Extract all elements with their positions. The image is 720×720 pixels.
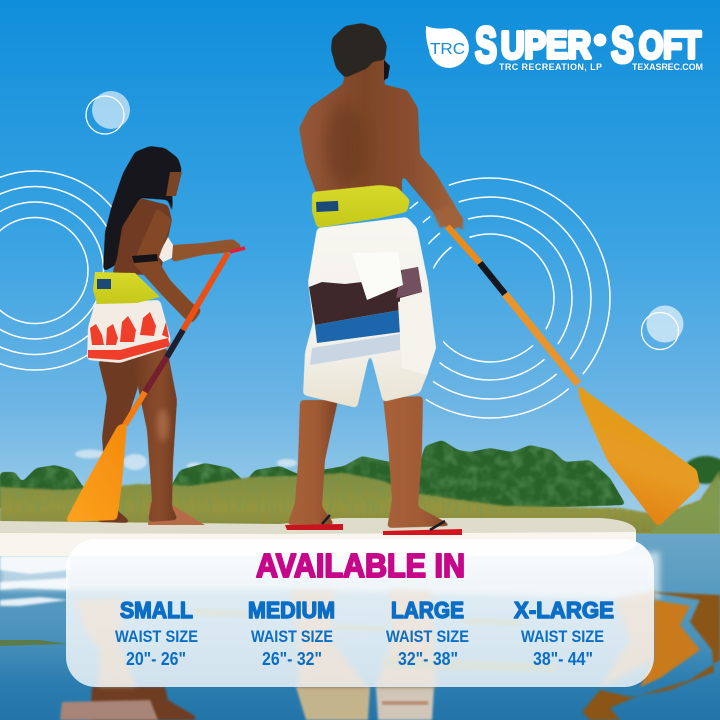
column: medium (248, 597, 335, 669)
man: board shorts (303, 217, 436, 408)
man: shorts brown band (309, 267, 422, 325)
logo: wordmark: S (611, 17, 634, 73)
woman: bikini (158, 237, 173, 262)
panel background (66, 539, 654, 687)
reflection: man (296, 687, 370, 720)
man: sunglasses (384, 60, 390, 80)
woman figure (65, 146, 245, 525)
column: large: WAIST SIZE (386, 627, 469, 646)
woman: skirt (87, 300, 171, 363)
column: large: 32"- 38" (398, 649, 458, 669)
man: hair (331, 23, 387, 78)
heading: available in: AVAILABLE IN (256, 547, 465, 584)
grass field (0, 470, 720, 534)
woman: far arm (168, 239, 243, 262)
column: x-large (514, 597, 614, 669)
reflections under the panel (75, 590, 654, 687)
water reflections (0, 552, 720, 720)
logo: website: TEXASREC.COM (632, 62, 703, 72)
sheen: board reflection (0, 552, 660, 600)
woman: near arm (133, 208, 202, 323)
sky background (0, 0, 720, 540)
bubble: right (642, 306, 684, 350)
column: small (115, 597, 198, 669)
column: medium: WAIST SIZE (251, 627, 333, 646)
logo: TRC droplet: TRC (430, 41, 465, 58)
man: flip-flops (285, 524, 343, 530)
treeline and grass (0, 440, 720, 534)
column: medium: MEDIUM (248, 597, 335, 623)
woman: torso (112, 198, 172, 275)
column: large: LARGE (391, 597, 464, 623)
clouds (75, 450, 297, 470)
water (0, 534, 720, 720)
man: paddle blade (577, 383, 700, 527)
column: large (386, 597, 469, 669)
column: small: WAIST SIZE (115, 627, 198, 646)
bubble: left (86, 91, 130, 134)
woman: hair (103, 146, 182, 272)
woman: belt logo (97, 279, 111, 289)
logo: wordmark (475, 17, 701, 73)
woman: skirt red pattern (88, 312, 170, 360)
logo (426, 17, 703, 73)
reflection: woman (90, 687, 195, 720)
woman: face (166, 172, 182, 196)
logo: wordmark: S (475, 17, 497, 73)
man: flotation belt (312, 185, 410, 228)
man: back pocket (352, 252, 403, 300)
logo: wordmark: UPER (501, 25, 591, 67)
logo: wordmark: OFT (639, 25, 701, 67)
woman: sandal foot (148, 502, 205, 525)
woman: paddle blade (65, 423, 127, 522)
man: head neck and shoulders (299, 55, 464, 232)
reflection: right paddle (582, 592, 720, 720)
column: small: 20"- 26" (126, 649, 186, 669)
woman: front leg (130, 348, 178, 522)
woman: flotation belt (93, 272, 160, 304)
man: shorts pale band (310, 334, 400, 365)
man: paddle shaft (447, 226, 578, 384)
woman: back leg (97, 358, 138, 523)
man: hand on paddle (433, 205, 463, 230)
man figure (285, 23, 700, 535)
woman: paddle shaft (125, 248, 245, 425)
rings: right concentric circles (408, 177, 611, 419)
logo: TRC droplet (426, 26, 469, 68)
man: belt logo (316, 201, 338, 212)
column: medium: 26"- 32" (262, 649, 322, 669)
man: legs (287, 400, 338, 525)
column: x-large: 38"- 44" (533, 649, 593, 669)
man: cargo pocket (398, 295, 436, 375)
column: x-large: WAIST SIZE (521, 627, 604, 646)
paddleboard (0, 518, 636, 556)
column: x-large: X-LARGE (514, 597, 614, 623)
size panel (66, 539, 654, 687)
rings: left concentric circles (0, 171, 134, 370)
man: shorts blue band (315, 310, 401, 343)
column: small: SMALL (120, 597, 193, 623)
logo: company name: TRC RECREATION, LP (499, 62, 602, 72)
